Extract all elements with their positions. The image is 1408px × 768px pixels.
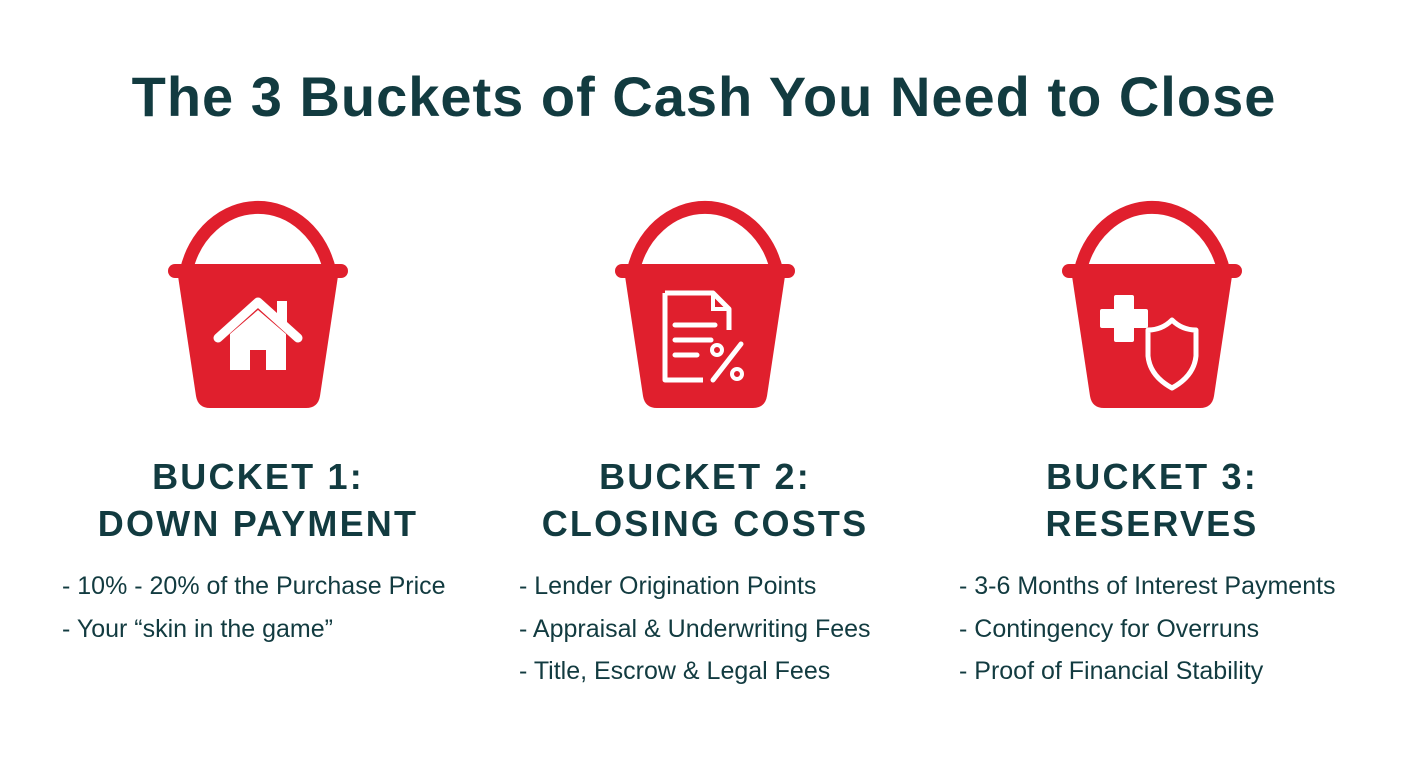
bullets 3: - Proof of Financial Stability: [959, 657, 1263, 685]
panel: bucket 3 text: [959, 456, 1336, 685]
bullets 3: [959, 572, 1336, 685]
bullets 2: - Lender Origination Points: [519, 572, 816, 600]
bullets 2: [519, 572, 871, 685]
icon: bucket 2 document: [615, 207, 795, 408]
heading 2: CLOSING COSTS: [542, 503, 868, 544]
heading 1: BUCKET 1:: [152, 456, 364, 497]
heading 3: BUCKET 3:: [1046, 456, 1258, 497]
heading 2: [542, 456, 868, 544]
bullets 3: - Contingency for Overruns: [959, 614, 1259, 642]
bullets 1: - 10% - 20% of the Purchase Price: [62, 572, 446, 600]
heading 3: RESERVES: [1045, 503, 1259, 544]
heading 3: [1045, 456, 1259, 544]
bullets 1: [62, 572, 446, 642]
heading 2: BUCKET 2:: [599, 456, 811, 497]
bullets 3: - 3-6 Months of Interest Payments: [959, 572, 1336, 600]
bullets 2: - Appraisal & Underwriting Fees: [519, 614, 871, 642]
icon: bucket 1 house: [168, 207, 348, 408]
panel: bucket 1 text: [62, 456, 446, 642]
heading 1: [98, 456, 418, 544]
bullets 1: - Your “skin in the game”: [62, 614, 333, 642]
bullets 2: - Title, Escrow & Legal Fees: [519, 657, 830, 685]
panel: bucket 2 text: [519, 456, 871, 685]
icon: bucket 3 plus shield: [1062, 207, 1242, 408]
title: The 3 Buckets of Cash You Need to Close: [132, 65, 1276, 128]
heading 1: DOWN PAYMENT: [98, 503, 418, 544]
